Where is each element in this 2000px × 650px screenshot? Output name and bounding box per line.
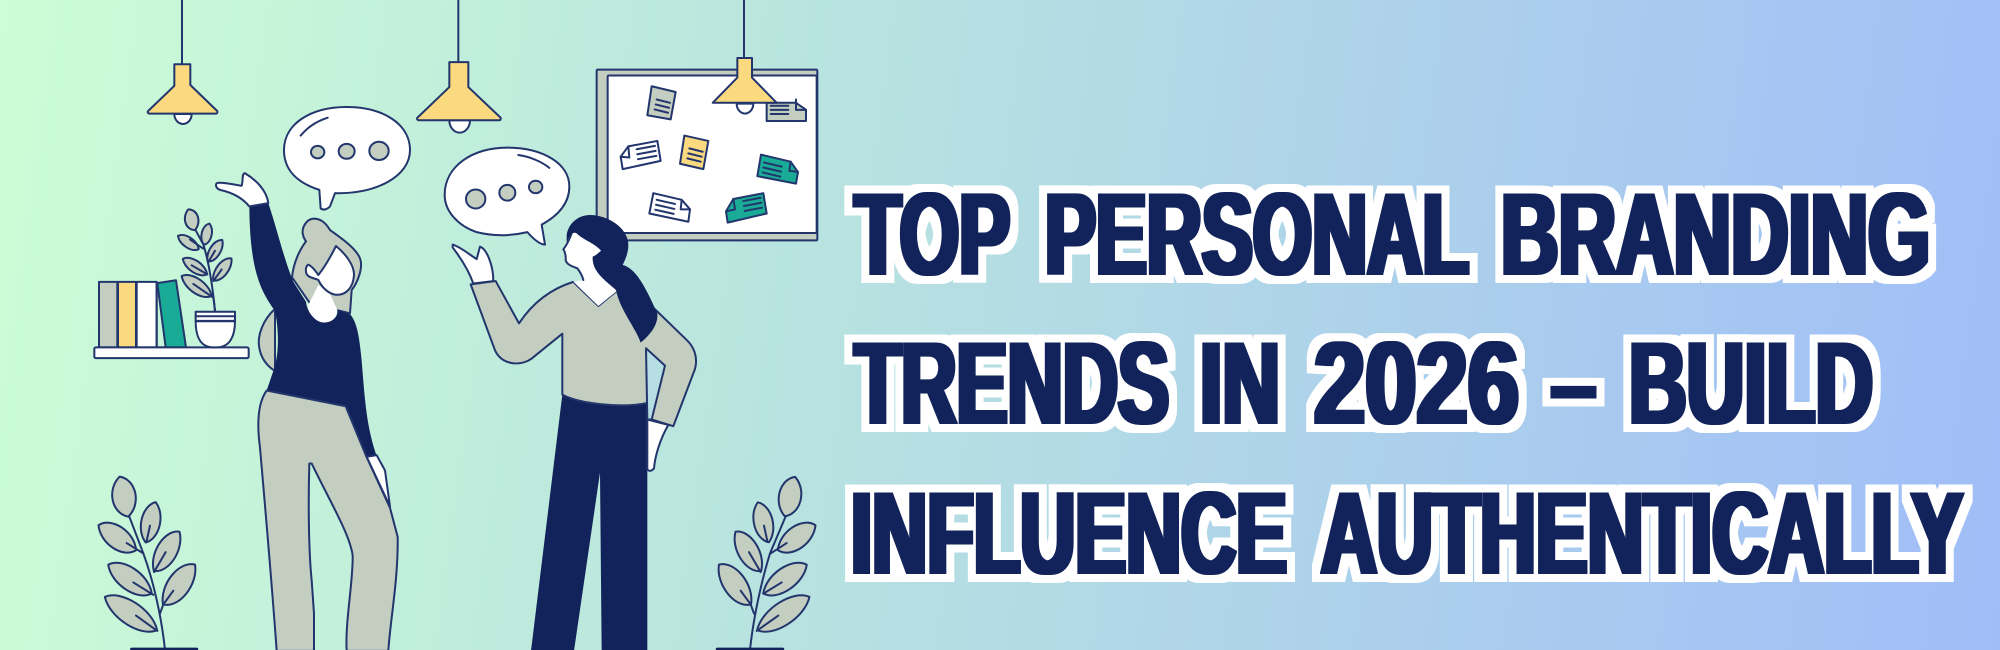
right illustration scene [417,0,820,650]
speech bubble: right [445,148,569,245]
lamp: right over board [713,0,777,114]
note: teal folded left [726,193,767,223]
lamp: left [148,0,217,124]
title line 3: INFLUENCE [851,467,1287,598]
small potted plant [176,206,235,347]
title line 2: – [1551,317,1596,448]
title line 1: PERSONAL [1045,168,1469,299]
notice board [597,70,817,240]
note: grey pinned [647,86,676,119]
title line 1: TOP [854,168,1010,299]
note: teal folded right [757,155,798,184]
note: white folded right [649,193,690,222]
note: grey folded [767,99,806,121]
title line 2 [854,317,1873,448]
note: yellow pinned [680,136,708,169]
head: face, neck and ponytail [563,215,657,343]
plant: bottom right [712,473,820,650]
head: hair, neck and face [292,219,361,323]
woman raising arm [216,173,398,650]
lamp: centre [417,0,501,133]
title line 1 [854,168,1930,299]
shelf with books [94,280,249,358]
title line 2: 2026 [1314,317,1519,448]
note: white folded left [621,141,661,169]
woman with ponytail [453,215,696,650]
plant: bottom left [94,473,202,650]
title [851,168,1963,598]
title line 2: IN [1200,317,1280,448]
title line 2: BUILD [1629,317,1873,448]
title line 2: TRENDS [854,317,1169,448]
speech bubble: left [284,107,410,210]
left illustration scene [94,0,410,650]
title line 3 [851,467,1963,598]
